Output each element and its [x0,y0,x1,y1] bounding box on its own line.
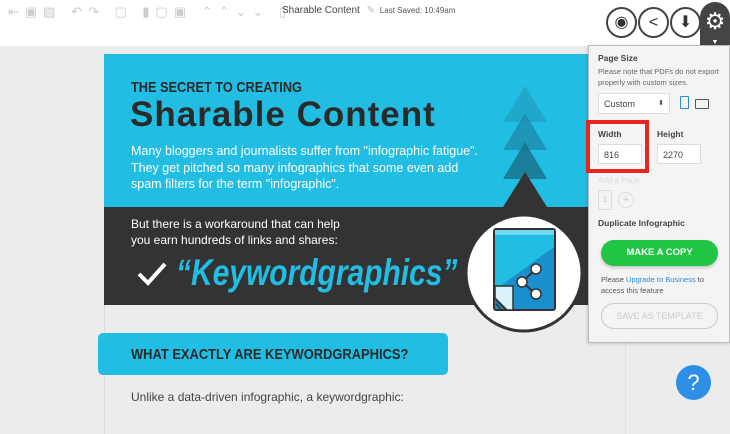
main title: Sharable Content [130,95,436,134]
workaround text [131,217,340,247]
document icon [494,229,555,310]
keywordgraphics headline: “Keywordgraphics” [176,252,457,293]
settings panel: + [623,194,629,206]
document title: Sharable Content ✎ Last Saved: 10:49am [282,5,455,16]
section heading bar [98,333,448,375]
size dropdown: ⬍ [658,100,664,107]
toolbar icons: ⇤▣▨ ↶↷ ▢ ▮▢▣ ⌃⌃⌄⌄ ▯ [8,4,292,19]
settings panel [588,45,730,343]
action buttons: ⬇ [679,14,692,31]
checkmark icon [138,262,166,286]
settings panel: 816 [604,150,619,160]
workaround text: But there is a workaround that can help [131,217,340,231]
settings panel: Please note that PDFs do not export [598,67,719,76]
settings panel: 1 [603,195,607,204]
settings gear tab: ⚙ [705,8,725,34]
settings panel: Duplicate Infographic [598,218,685,228]
help button [676,365,711,400]
help button: ? [687,370,700,395]
intro paragraph [131,144,478,191]
size dropdown [598,93,670,114]
intro paragraph: They get pitched so many infographics that some even add [131,160,458,174]
action buttons [606,7,700,38]
infographic page outline [104,54,626,434]
make a copy button [601,240,718,266]
settings panel: Please Upgrade to Business to [601,275,704,284]
save template button: SAVE AS TEMPLATE [616,311,703,321]
settings panel: Add a Page [598,176,640,185]
triangles decoration [503,86,547,207]
intro paragraph: Many bloggers and journalists suffer from "infographic fatigue". [131,144,478,158]
settings panel: 2270 [663,150,683,160]
width field highlighted [586,120,649,173]
toolbar [0,0,730,46]
dark section [104,207,588,305]
settings gear tab: ▼ [712,39,718,46]
workaround text: you earn hundreds of links and shares: [131,233,338,247]
section heading bar: WHAT EXACTLY ARE KEYWORDGRAPHICS? [131,346,408,363]
settings gear tab [700,2,730,48]
settings panel: Page Size [598,53,638,63]
settings panel: properly with custom sizes. [598,78,688,86]
action buttons: ◉ [615,14,628,31]
body text: Unlike a data-driven infographic, a keywordgraphic: [131,390,404,404]
intro paragraph: spam filters for the term "infographic". [131,177,339,191]
size dropdown: Custom [604,99,635,109]
blue header section [104,54,588,207]
height field: Height [657,129,683,139]
action buttons: < [649,14,658,31]
small heading: THE SECRET TO CREATING [131,79,302,96]
settings panel: Width [598,129,622,139]
circle icon [468,216,580,332]
make a copy button: MAKE A COPY [626,247,693,258]
settings panel: access this feature [601,286,664,294]
save template button [601,303,718,329]
